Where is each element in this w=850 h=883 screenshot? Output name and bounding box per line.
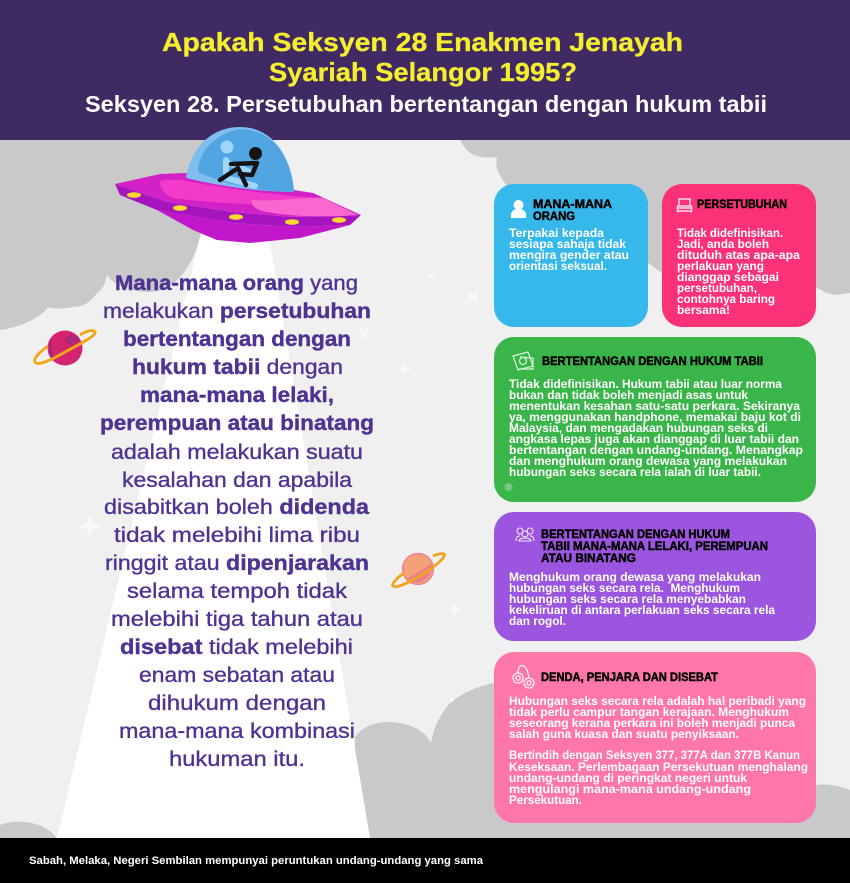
icon: person xyxy=(511,200,526,218)
main legal text: tidak melebihi lima ribu xyxy=(114,524,360,547)
cloud: bottom left xyxy=(0,822,57,838)
text: denda paragraph one: Hubungan seks secara rela adalah hal peribadi yang xyxy=(509,694,806,708)
text: lelaki, perempuan atau binatang: dan rogol. xyxy=(509,614,566,628)
text: bertentangan dengan hukum tabii: hubungan seks secara rela ialah di luar tabii. xyxy=(509,465,761,479)
text: lelaki, perempuan atau binatang: hubungan seks secara rela. Menghukum xyxy=(509,581,740,595)
UFO lights xyxy=(127,192,346,225)
text: lelaki, perempuan atau binatang: Menghukum orang dewasa yang melakukan xyxy=(509,570,761,584)
icon: handcuffs xyxy=(513,666,534,688)
text: mana-mana orang: mengira gender atau xyxy=(509,248,629,262)
main legal text: ringgit atau dipenjarakan xyxy=(105,552,369,575)
heading: bertentangan dengan hukum tabii: BERTENTANGAN DENGAN HUKUM TABII xyxy=(542,356,763,368)
main legal text: enam sebatan atau xyxy=(139,664,335,687)
main legal text: dihukum dengan xyxy=(148,692,326,715)
text: mana-mana orang: orientasi seksual. xyxy=(509,259,607,273)
main legal text xyxy=(100,272,374,771)
subtitle: Seksyen 28. Persetubuhan bertentangan dengan hukum tabii xyxy=(85,91,767,117)
text: lelaki, perempuan atau binatang: hubungan seks secara rela menyebabkan xyxy=(509,592,746,606)
text: bertentangan dengan hukum tabii: dan menghukum orang dewasa yang melakukan xyxy=(509,454,787,468)
text: persetubuhan: bersama! xyxy=(677,303,730,317)
text: bertentangan dengan hukum tabii: ya, menggunakan handphone, memakai baju kot di xyxy=(509,410,801,424)
cloud: bottom right xyxy=(355,683,850,838)
main legal text: mana-mana kombinasi xyxy=(119,720,355,743)
heading: lelaki, perempuan atau binatang: BERTENTANGAN DENGAN HUKUM xyxy=(541,529,730,541)
figure: dark person xyxy=(220,147,262,185)
text: denda paragraph two xyxy=(509,748,808,807)
text: denda paragraph one: seseorang kerana perkara ini boleh menjadi punca xyxy=(509,716,795,730)
panel: denda, penjara dan disebat xyxy=(494,652,816,823)
text: mana-mana orang xyxy=(509,226,629,273)
text: bertentangan dengan hukum tabii: Tidak didefinisikan. Hukum tabii atau luar norma xyxy=(509,377,782,391)
heading: lelaki, perempuan atau binatang: ATAU BINATANG xyxy=(541,553,636,565)
panel: persetubuhan xyxy=(662,184,816,327)
UFO underside and rim xyxy=(157,210,350,243)
text: bertentangan dengan hukum tabii: menentukan kesahan satu-satu perkara. Sekiranya xyxy=(509,399,800,413)
icon: group of people xyxy=(516,528,534,541)
decorative stars xyxy=(79,274,479,702)
text: persetubuhan: Tidak didefinisikan. xyxy=(677,226,783,240)
text: denda paragraph two: Keseksaan. Perlembagaan Persekutuan menghalang xyxy=(509,760,808,774)
text: persetubuhan: dianggap sebagai xyxy=(677,270,779,284)
UFO top surface xyxy=(115,173,361,217)
title: Syariah Selangor 1995? xyxy=(269,57,577,87)
main legal text: perempuan atau binatang xyxy=(100,412,374,435)
main legal text: melebihi tiga tahun atau xyxy=(111,608,363,631)
main legal text: hukuman itu. xyxy=(169,748,305,771)
main legal text: adalah melakukan suatu xyxy=(111,441,363,464)
main legal text: disabitkan boleh didenda xyxy=(104,496,369,519)
icon: banknotes xyxy=(513,352,533,370)
icon: orange planet xyxy=(393,554,444,587)
heading: denda, penjara dan disebat: DENDA, PENJARA DAN DISEBAT xyxy=(541,672,718,684)
text: lelaki, perempuan atau binatang: kekeliruan di antara perlakuan seks secara rela xyxy=(509,603,775,617)
beam of light xyxy=(57,237,370,838)
text: persetubuhan: persetubuhan, xyxy=(677,281,757,295)
text: denda paragraph two: undang-undang di peringkat negeri untuk xyxy=(509,771,747,785)
text: persetubuhan: perlakuan yang xyxy=(677,259,764,273)
icon: pink planet xyxy=(35,330,95,366)
panel: mana-mana orang xyxy=(494,184,648,327)
text: persetubuhan: contohnya baring xyxy=(677,292,775,306)
text: denda paragraph one: tidak perlu campur tangan kerajaan. Menghukum xyxy=(509,705,789,719)
main legal text: mana-mana lelaki, xyxy=(140,384,334,407)
text: bertentangan dengan hukum tabii: Malaysia, dan mengadakan hubungan seks di xyxy=(509,421,768,435)
text: lelaki, perempuan atau binatang xyxy=(509,570,775,628)
header band xyxy=(0,0,850,140)
UFO dome xyxy=(186,127,294,192)
main legal text: bertentangan dengan xyxy=(123,328,351,351)
icon: bed xyxy=(678,199,692,212)
title xyxy=(162,27,683,87)
text: bertentangan dengan hukum tabii: bertentangan dengan undang-undang. Menangkap xyxy=(509,443,803,457)
main legal text: Mana-mana orang yang xyxy=(115,272,358,295)
text: denda paragraph two: Persekutuan. xyxy=(509,793,582,807)
text: bertentangan dengan hukum tabii xyxy=(509,377,803,479)
panel: lelaki, perempuan atau binatang xyxy=(494,512,816,641)
figure: light person xyxy=(220,140,255,186)
heading: mana-mana orang: MANA-MANA xyxy=(533,199,612,211)
text: bertentangan dengan hukum tabii: bukan dan tidak boleh menjadi asas untuk xyxy=(509,388,748,402)
text: bertentangan dengan hukum tabii: angkasa lepas juga akan dianggap di luar tabii dan xyxy=(509,432,799,446)
text: denda paragraph two: mengulangi mana-mana undang-undang xyxy=(509,782,751,796)
main legal text: hukum tabii dengan xyxy=(132,356,343,379)
main legal text: selama tempoh tidak xyxy=(127,580,348,603)
cloud: top right xyxy=(460,140,850,295)
text: denda paragraph one xyxy=(509,694,806,741)
main legal text: kesalahan dan apabila xyxy=(122,469,352,492)
heading: lelaki, perempuan atau binatang xyxy=(541,529,768,565)
panel: bertentangan dengan hukum tabii xyxy=(494,337,816,502)
main legal text: disebat tidak melebihi xyxy=(120,636,353,659)
text: denda paragraph one: salah guna kuasa dan suatu penyiksaan. xyxy=(509,727,739,741)
heading: mana-mana orang xyxy=(533,199,612,223)
text: persetubuhan: Jadi, anda boleh xyxy=(677,237,769,251)
heading: persetubuhan: PERSETUBUHAN xyxy=(697,199,787,211)
text: persetubuhan xyxy=(677,226,800,317)
title: Apakah Seksyen 28 Enakmen Jenayah xyxy=(162,27,683,57)
UFO xyxy=(115,127,361,243)
heading: lelaki, perempuan atau binatang: TABII MANA-MANA LELAKI, PEREMPUAN xyxy=(541,541,768,553)
text: mana-mana orang: sesiapa sahaja tidak xyxy=(509,237,626,251)
text: persetubuhan: dituduh atas apa-apa xyxy=(677,248,800,262)
footer xyxy=(0,838,850,883)
footer note: Sabah, Melaka, Negeri Sembilan mempunyai peruntukan undang-undang yang sama xyxy=(29,855,484,867)
text: denda paragraph two: Bertindih dengan Seksyen 377, 377A dan 377B Kanun xyxy=(509,748,800,762)
text: mana-mana orang: Terpakai kepada xyxy=(509,226,604,240)
main legal text: melakukan persetubuhan xyxy=(103,300,371,323)
heading: mana-mana orang: ORANG xyxy=(533,211,575,223)
cloud: top left xyxy=(0,140,215,330)
